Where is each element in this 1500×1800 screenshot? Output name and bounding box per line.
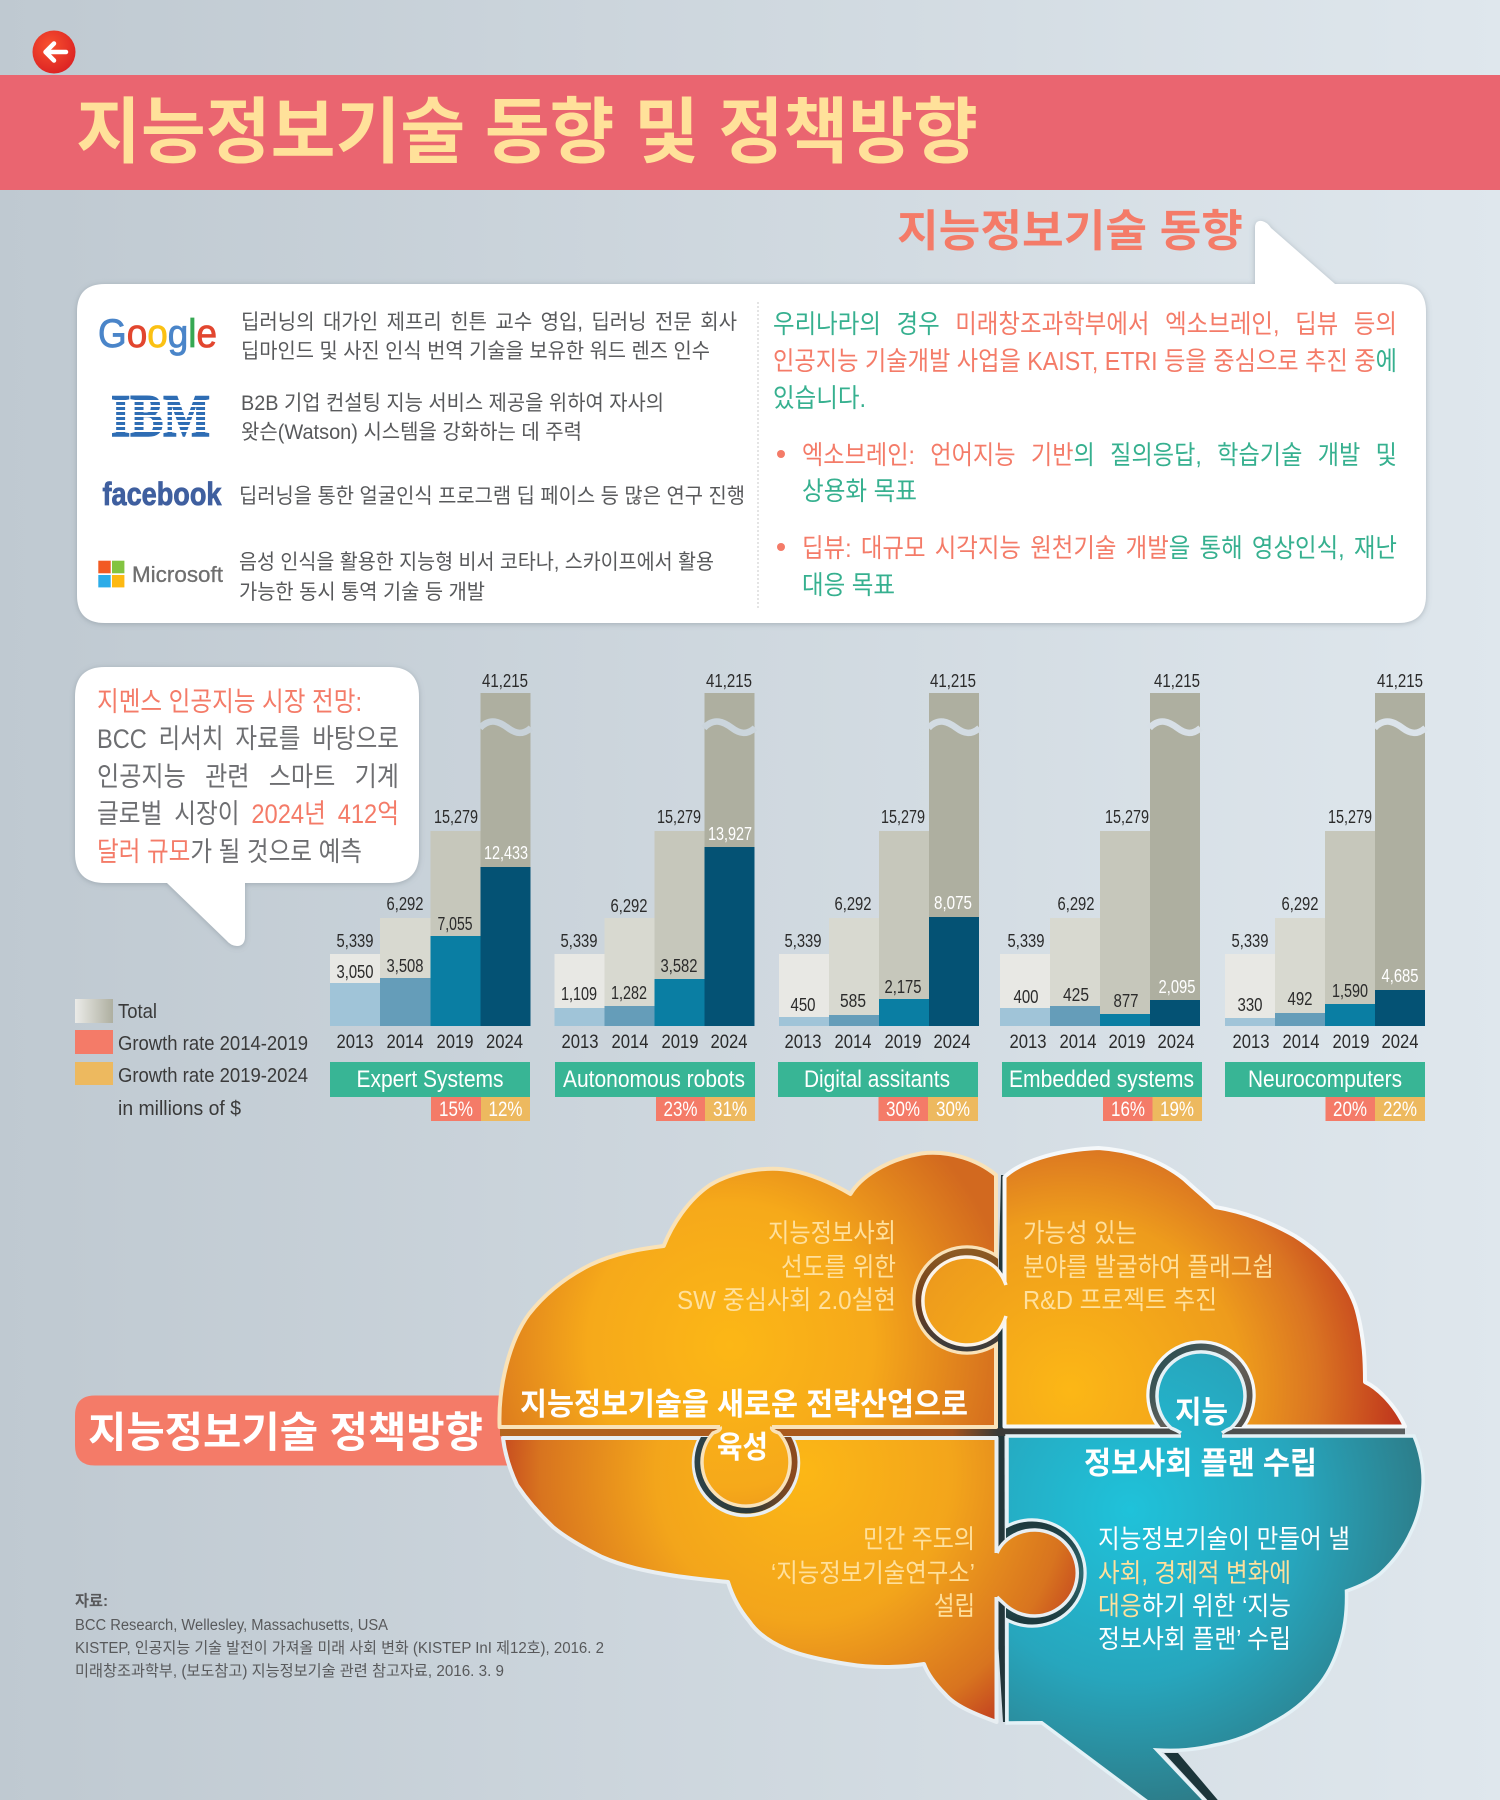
text: teal piece: 대응하기 위한 ‘지능 <box>1098 1591 1291 1621</box>
legend: in millions of $ <box>118 1098 241 1120</box>
bar chart: Expert Systems: 12,433 <box>484 843 528 863</box>
text: IBM: 왓슨(Watson) 시스템을 강화하는 데 주력 <box>241 421 582 444</box>
bar chart: Embedded systems: 2024 <box>1158 1032 1195 1053</box>
bar chart: Digital assitants: 2,175 <box>884 977 922 997</box>
sources: KISTEP, 인공지능 기술 발전이 가져올 미래 사회 변화 (KISTEP InI 제12호), 2016. 2 <box>75 1639 604 1657</box>
bar chart: Embedded systems: Embedded systems <box>1009 1066 1194 1093</box>
panel: technology trends <box>77 221 1426 623</box>
bar chart: Digital assitants: 30% <box>936 1098 970 1121</box>
knob: lower-left into teal <box>979 1520 1085 1626</box>
bar chart: Expert Systems: 3,508 <box>386 956 424 976</box>
logo: Microsoft <box>98 561 223 587</box>
bar chart: Autonomous robots: 5,339 <box>560 931 598 951</box>
title banner <box>0 75 1500 190</box>
legend <box>75 999 308 1120</box>
bar chart: Autonomous robots: 1,109 <box>561 984 597 1004</box>
bar chart: Neurocomputers: 4,685 <box>1382 966 1418 986</box>
bar chart: Expert Systems: 2024 <box>486 1032 523 1053</box>
bar chart: Autonomous robots <box>554 671 755 1121</box>
bar chart: Expert Systems <box>330 671 531 1121</box>
bar chart: Neurocomputers: 41,215 <box>1377 671 1423 691</box>
section heading: policy direction: 지능정보기술 정책방향 <box>88 1409 483 1456</box>
legend: Growth rate 2019-2024 <box>118 1065 308 1087</box>
bar chart: Expert Systems: 6,292 <box>386 894 424 914</box>
legend: Total <box>118 1001 157 1023</box>
bar chart: Embedded systems: 6,292 <box>1058 894 1094 914</box>
text: intelligence society plan heading <box>1084 1395 1317 1481</box>
text: strategic industry heading: 지능정보기술을 새로운 전략산업으로 <box>520 1387 968 1422</box>
bullet: Exobrain: 엑소브레인: 언어지능 기반의 질의응답, 학습기술 개발 및 <box>802 440 1397 470</box>
knob: teal into top-right <box>1148 1342 1254 1448</box>
bar chart: Expert Systems: 2019 <box>436 1032 474 1053</box>
diagram: brain puzzle <box>499 1148 1423 1800</box>
text: teal piece: 지능정보기술이 만들어 낼 <box>1098 1524 1350 1554</box>
bar chart: Autonomous robots: 6,292 <box>610 896 648 916</box>
text: IBM <box>241 392 664 444</box>
bar chart: Autonomous robots: 3,582 <box>660 956 698 976</box>
callout: market forecast: 달러 규모가 될 것으로 예측 <box>97 837 362 867</box>
bar chart: Embedded systems: 19% <box>1160 1098 1194 1121</box>
bar chart: Neurocomputers: 1,590 <box>1332 981 1368 1001</box>
bar chart: Autonomous robots: 15,279 <box>657 807 701 827</box>
bar chart: Embedded systems: 425 <box>1063 985 1089 1005</box>
text: lower-left piece <box>771 1524 975 1621</box>
tail fold <box>1164 1753 1222 1800</box>
text: lower-left piece: ‘지능정보기술연구소’ <box>771 1558 975 1588</box>
text: Microsoft <box>239 551 714 604</box>
bar chart: Neurocomputers: Neurocomputers <box>1248 1066 1402 1093</box>
bar chart: Neurocomputers: 2013 <box>1232 1032 1270 1053</box>
text: top-right piece: 가능성 있는 <box>1023 1218 1137 1248</box>
bullet: Exobrain: 상용화 목표 <box>802 476 917 506</box>
sources: 미래창조과학부, (보도참고) 지능정보기술 관련 참고자료, 2016. 3. 9 <box>75 1662 504 1680</box>
bar chart: Expert Systems: 7,055 <box>438 914 472 934</box>
text: teal piece: 사회, 경제적 변화에 <box>1098 1558 1291 1588</box>
section heading: policy direction <box>75 1396 520 1466</box>
text: top-right piece: 분야를 발굴하여 플래그쉽 <box>1023 1252 1274 1282</box>
text: Korean programmes <box>773 309 1397 413</box>
bar chart: Embedded systems: 5,339 <box>1008 931 1044 951</box>
text: top-left piece: 지능정보사회 <box>768 1218 896 1248</box>
bar chart: Digital assitants: 6,292 <box>834 894 872 914</box>
piece: top-left <box>499 1153 996 1427</box>
bar chart: Neurocomputers: 2014 <box>1282 1032 1320 1053</box>
sources: 자료: <box>75 1592 108 1610</box>
logo: Microsoft: Microsoft <box>132 562 223 587</box>
bullet: Deep View: 대응 목표 <box>802 570 895 600</box>
bar chart: Expert Systems: 15,279 <box>434 807 478 827</box>
bar chart: Expert Systems: 3,050 <box>336 962 374 982</box>
bar chart: Neurocomputers: 492 <box>1288 989 1312 1009</box>
text: Korean programmes: 우리나라의 경우 미래창조과학부에서 엑소브레인, 딥뷰 등의 <box>773 309 1397 339</box>
bar chart: Digital assitants: 30% <box>886 1098 920 1121</box>
bar chart: Autonomous robots: Autonomous robots <box>563 1066 745 1093</box>
text: facebook: 딥러닝을 통한 얼굴인식 프로그램 딥 페이스 등 많은 연구 진행 <box>239 485 745 508</box>
bar chart: Neurocomputers: 2024 <box>1382 1032 1419 1053</box>
piece: top-right <box>1004 1148 1405 1426</box>
knob: top-right into top-left <box>914 1247 1020 1353</box>
callout: market forecast: BCC 리서치 자료를 바탕으로 <box>97 724 399 754</box>
bar chart: Expert Systems: 12% <box>488 1098 522 1121</box>
bar chart: Expert Systems: 41,215 <box>482 671 528 691</box>
bar chart: Digital assitants: 450 <box>790 995 816 1015</box>
text: Korean programmes: 인공지능 기술개발 사업을 KAIST, ETRI 등을 중심으로 추진 중에 <box>773 346 1397 376</box>
piece: lower-left <box>503 1438 996 1722</box>
bullet: Exobrain <box>777 440 1397 506</box>
bar chart: Autonomous robots: 23% <box>664 1098 698 1121</box>
sources <box>75 1592 604 1680</box>
bar chart: Expert Systems: 2013 <box>336 1032 374 1053</box>
bar chart: Embedded systems: 2019 <box>1108 1032 1146 1053</box>
bar chart: Digital assitants: 41,215 <box>930 671 976 691</box>
text: teal piece <box>1098 1524 1350 1654</box>
bar chart: Digital assitants: 2024 <box>934 1032 971 1053</box>
logo: Google: Google <box>98 312 217 356</box>
text: lower-left piece: 민간 주도의 <box>863 1524 975 1554</box>
text: lower-left piece: 설립 <box>934 1591 975 1621</box>
bar chart: Neurocomputers <box>1225 671 1426 1121</box>
text: top-left piece: 선도를 위한 <box>781 1252 896 1282</box>
bar chart: Neurocomputers: 330 <box>1238 995 1262 1015</box>
title banner: 지능정보기술 동향 및 정책방향 <box>76 93 978 173</box>
bar chart: Autonomous robots: 2024 <box>710 1032 748 1053</box>
bar chart: Neurocomputers: 22% <box>1383 1098 1417 1121</box>
icon: back arrow button <box>32 30 76 74</box>
text: strategic industry heading: 육성 <box>717 1430 768 1465</box>
bar chart: Neurocomputers: 20% <box>1333 1098 1367 1121</box>
callout: market forecast: 인공지능 관련 스마트 기계 <box>97 762 399 792</box>
bar chart: Neurocomputers: 15,279 <box>1328 807 1372 827</box>
callout: market forecast: 글로벌 시장이 2024년 412억 <box>97 799 399 829</box>
text: Google: 딥러닝의 대가인 제프리 힌튼 교수 영입, 딥러닝 전문 회사 <box>241 311 737 334</box>
bar chart: Digital assitants: 5,339 <box>784 931 822 951</box>
bar chart: Digital assitants <box>778 671 980 1121</box>
bar chart: Neurocomputers: 2019 <box>1332 1032 1370 1053</box>
bar chart: Autonomous robots: 41,215 <box>706 671 752 691</box>
bar chart: Embedded systems: 2,095 <box>1158 977 1196 997</box>
bar chart: Digital assitants: 8,075 <box>934 893 972 913</box>
bar chart: Embedded systems: 15,279 <box>1105 807 1149 827</box>
piece: teal lower-right with speech tail <box>1007 1436 1423 1800</box>
bar chart: Digital assitants: Digital assitants <box>804 1066 950 1093</box>
bar chart: Autonomous robots: 2014 <box>612 1032 649 1053</box>
bar chart: Embedded systems: 2014 <box>1060 1032 1097 1053</box>
text: Google <box>241 311 737 363</box>
bar chart: Expert Systems: 15% <box>439 1098 473 1121</box>
bullet: Deep View: 딥뷰: 대규모 시각지능 원천기술 개발을 통해 영상인식, 재난 <box>802 533 1397 563</box>
text: top-left piece: SW 중심사회 2.0실현 <box>677 1285 896 1315</box>
bar chart: Digital assitants: 2019 <box>884 1032 922 1053</box>
text: Microsoft: 음성 인식을 활용한 지능형 비서 코타나, 스카이프에서 활용 <box>239 551 714 574</box>
bar chart: Embedded systems: 877 <box>1114 991 1138 1011</box>
bar chart: Autonomous robots: 1,282 <box>611 983 647 1003</box>
bar chart: Autonomous robots: 2013 <box>562 1032 598 1053</box>
logo: IBM: IBM <box>111 383 210 449</box>
text: intelligence society plan heading: 지능 <box>1175 1395 1228 1430</box>
text: strategic industry heading <box>520 1387 968 1465</box>
bar chart: Digital assitants: 2013 <box>784 1032 822 1053</box>
section heading: trends: 지능정보기술 동향 <box>897 207 1243 256</box>
bar chart: Digital assitants: 2014 <box>834 1032 872 1053</box>
text: Google: 딥마인드 및 사진 인식 번역 기술을 보유한 워드 렌즈 인수 <box>241 340 710 363</box>
text: teal piece: 정보사회 플랜’ 수립 <box>1098 1624 1291 1654</box>
text: Microsoft: 가능한 동시 통역 기술 등 개발 <box>239 581 485 604</box>
text: IBM: B2B 기업 컨설팅 지능 서비스 제공을 위하여 자사의 <box>241 392 664 415</box>
bar chart: Neurocomputers: 5,339 <box>1232 931 1268 951</box>
bar chart: Digital assitants: 585 <box>840 991 866 1011</box>
bar chart: Autonomous robots: 13,927 <box>708 824 752 844</box>
bar chart: Digital assitants: 15,279 <box>881 807 925 827</box>
text: Korean programmes: 있습니다. <box>773 383 866 413</box>
bar chart: Expert Systems: 2014 <box>386 1032 424 1053</box>
bar chart: Expert Systems: Expert Systems <box>356 1066 504 1093</box>
bar chart: Autonomous robots: 31% <box>713 1098 747 1121</box>
bar chart: Embedded systems: 16% <box>1111 1098 1145 1121</box>
bar chart: Embedded systems: 2013 <box>1010 1032 1046 1053</box>
bar chart: Embedded systems: 400 <box>1014 987 1038 1007</box>
bullet: Deep View <box>777 533 1397 600</box>
bar chart: Embedded systems: 41,215 <box>1154 671 1200 691</box>
text: intelligence society plan heading: 정보사회 플랜 수립 <box>1084 1446 1317 1481</box>
bar chart: Autonomous robots: 2019 <box>662 1032 698 1053</box>
sources: BCC Research, Wellesley, Massachusetts, USA <box>75 1617 389 1634</box>
logo: facebook: facebook <box>102 476 222 512</box>
legend: Growth rate 2014-2019 <box>118 1033 308 1055</box>
knob: top-left into lower-left <box>694 1410 798 1516</box>
bar chart: Expert Systems: 5,339 <box>336 931 374 951</box>
bar chart: Embedded systems <box>1000 671 1202 1121</box>
callout: market forecast <box>75 667 419 946</box>
bar chart: Neurocomputers: 6,292 <box>1282 894 1318 914</box>
callout: market forecast: 지멘스 인공지능 시장 전망: <box>97 687 362 717</box>
text: top-right piece <box>1023 1218 1274 1315</box>
text: top-right piece: R&D 프로젝트 추진 <box>1023 1285 1217 1315</box>
text: top-left piece <box>677 1218 896 1315</box>
